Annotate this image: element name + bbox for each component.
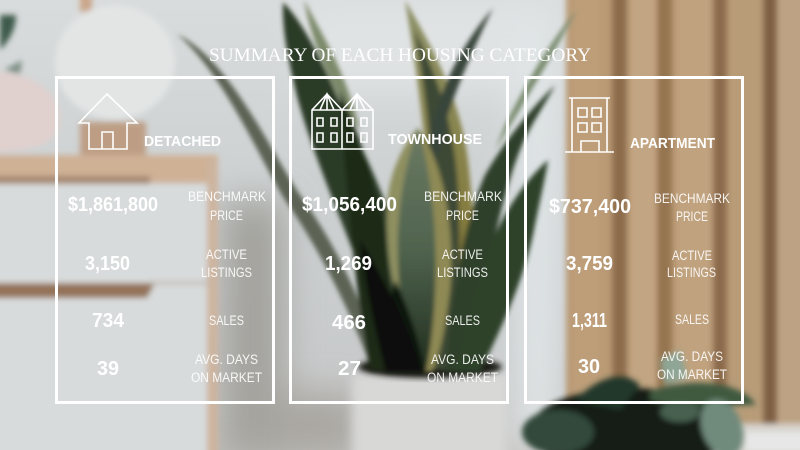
stat: active listings: 3,759 (566, 253, 613, 275)
left still life (80, 0, 92, 12)
stat: sales: 466 (332, 312, 366, 334)
stat: benchmark price (68, 189, 266, 223)
stat: benchmark price: BENCHMARK (188, 189, 266, 204)
stat: benchmark price: PRICE (446, 208, 479, 223)
stat: active listings: LISTINGS (201, 265, 252, 280)
stat: benchmark price (302, 189, 502, 223)
panel: townhouse (290, 78, 508, 402)
stat: average days on market: ON MARKET (657, 367, 727, 382)
icon: house (79, 94, 137, 149)
stat: average days on market: ON MARKET (427, 370, 498, 385)
stat: active listings: ACTIVE (206, 247, 247, 262)
stat: benchmark price: BENCHMARK (424, 189, 502, 204)
stat: sales (332, 312, 480, 334)
wood slats (566, 0, 800, 426)
stat: benchmark price: $1,056,400 (302, 194, 397, 216)
stat: sales: 1,311 (572, 310, 607, 332)
stat: active listings: 3,150 (85, 253, 130, 275)
icon: apartment building (565, 98, 614, 152)
stat: sales: 734 (92, 310, 125, 332)
stat: active listings (325, 247, 488, 280)
stat: active listings: 1,269 (325, 253, 372, 275)
stat: sales: SALES (209, 313, 244, 328)
plant leaves (177, 0, 577, 372)
stat: average days on market (578, 349, 727, 382)
stat: average days on market: 30 (578, 356, 600, 378)
stat: active listings: LISTINGS (667, 265, 716, 280)
stat: average days on market: 39 (97, 358, 119, 380)
stat: benchmark price: $1,861,800 (68, 194, 158, 216)
stat: benchmark price: PRICE (676, 209, 708, 224)
stat: average days on market: ON MARKET (191, 370, 262, 385)
heading: townhouse: TOWNHOUSE (388, 131, 482, 148)
stat: average days on market (338, 352, 498, 385)
pot (352, 374, 507, 450)
stat: active listings (85, 247, 252, 280)
stat: benchmark price: PRICE (210, 208, 243, 223)
bottom right foliage (522, 350, 756, 450)
stat: average days on market: AVG. DAYS (661, 349, 723, 364)
stat: sales (92, 310, 244, 332)
title: SUMMARY OF EACH HOUSING CATEGORY (209, 45, 591, 66)
stat: average days on market (97, 352, 262, 385)
stat: active listings: LISTINGS (437, 265, 488, 280)
stat: sales: SALES (445, 313, 480, 328)
stat: benchmark price: $737,400 (549, 196, 631, 218)
stat: average days on market: AVG. DAYS (195, 352, 258, 367)
heading: apartment: APARTMENT (630, 135, 715, 152)
stat: sales (572, 310, 709, 332)
stat: active listings (566, 248, 716, 280)
stat: benchmark price (549, 191, 730, 224)
panel: apartment (526, 78, 742, 402)
stat: active listings: ACTIVE (672, 248, 712, 263)
stat: average days on market: 27 (338, 358, 361, 380)
stat: sales: SALES (675, 312, 709, 327)
stat: average days on market: AVG. DAYS (431, 352, 494, 367)
icon: townhouses (312, 94, 373, 149)
stat: active listings: ACTIVE (442, 247, 483, 262)
heading: detached: DETACHED (144, 133, 221, 150)
stat: benchmark price: BENCHMARK (654, 191, 730, 206)
panel: detached (56, 78, 274, 402)
